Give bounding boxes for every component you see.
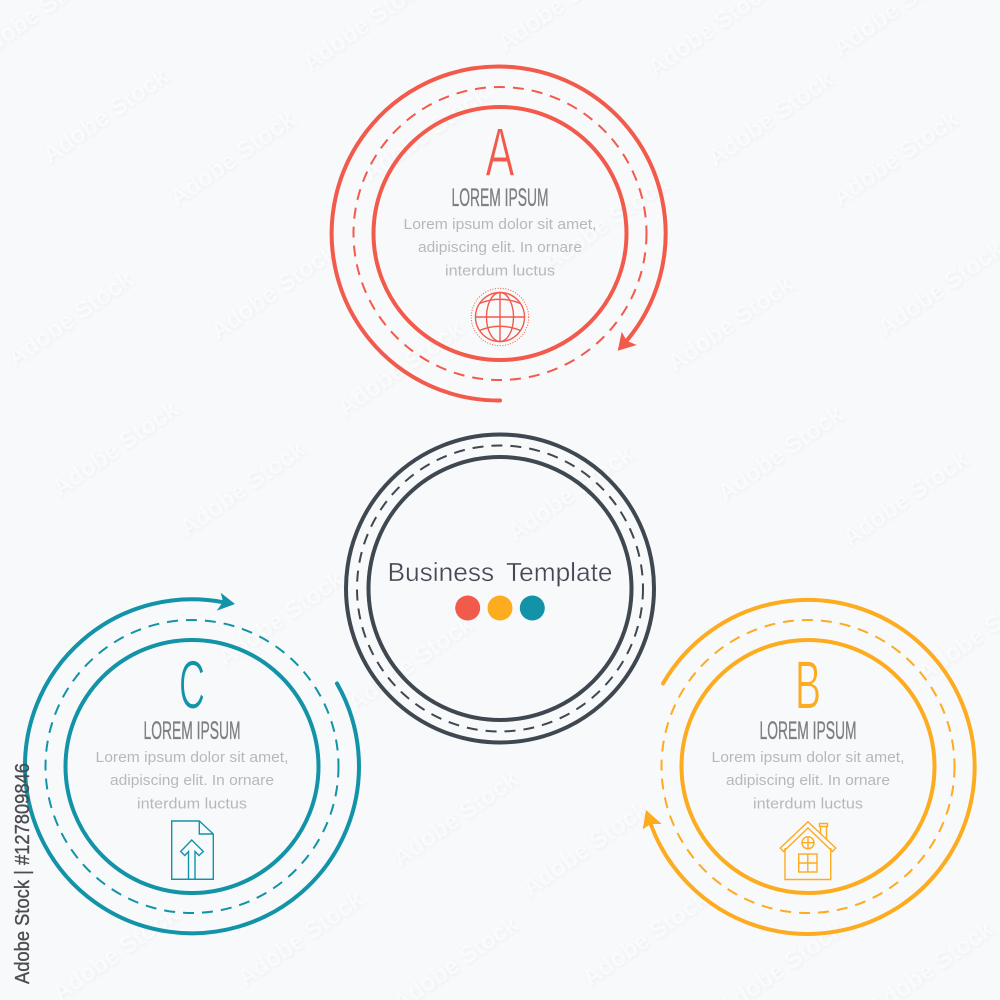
icon: globe (471, 288, 529, 346)
watermark pattern: Adobe Stock (713, 400, 849, 507)
panel: B (orange) (643, 600, 975, 934)
inner ring C (66, 640, 318, 893)
stock id side text: Adobe Stock | #127809846 (12, 763, 34, 984)
watermark pattern: Adobe Stock (48, 395, 184, 502)
text block B: Lorem ipsum dolor sit amet, (711, 749, 905, 766)
text block C (95, 749, 288, 812)
watermark pattern: Adobe Stock (175, 435, 311, 542)
text block C: adipiscing elit. In ornare (110, 772, 274, 789)
inner ring B (682, 640, 934, 893)
panel: center Business Template (346, 434, 654, 742)
title: Business Template (388, 557, 612, 587)
text block B: adipiscing elit. In ornare (726, 772, 890, 789)
watermark pattern: Adobe Stock (828, 105, 964, 212)
dashed ring A (354, 87, 646, 380)
dashed ring B (662, 620, 954, 913)
panel: A (red) (332, 67, 666, 401)
letter A: A (486, 114, 514, 191)
watermark pattern: Adobe Stock (343, 610, 479, 717)
text block A: interdum luctus (445, 262, 555, 280)
watermark pattern: Adobe Stock (578, 885, 714, 992)
text block C: Lorem ipsum dolor sit amet, (95, 749, 289, 766)
watermark pattern: Adobe Stock (333, 315, 469, 422)
text block B (712, 749, 904, 812)
letter B: B (795, 646, 821, 724)
outer ring center (346, 434, 654, 742)
text block A: adipiscing elit. In ornare (418, 239, 582, 256)
heading A: LOREM IPSUM (452, 184, 548, 212)
watermark pattern: Adobe Stock (538, 170, 674, 277)
dashed ring C (46, 620, 338, 913)
inner ring A (374, 107, 626, 360)
text block A (404, 216, 596, 280)
watermark pattern: Adobe Stock (703, 65, 839, 172)
watermark pattern: Adobe Stock (38, 62, 174, 169)
watermark pattern: Adobe Stock (3, 265, 139, 372)
watermark pattern: Adobe Stock (838, 445, 974, 552)
watermark pattern: Adobe Stock (388, 765, 524, 872)
outer arrow ring A (332, 67, 666, 401)
outer arrow ring C (25, 593, 359, 933)
inner ring center (368, 457, 632, 720)
outer arrow ring B (643, 600, 975, 934)
letter C: C (179, 646, 205, 724)
heading C: LOREM IPSUM (144, 717, 240, 745)
watermark pattern: Adobe Stock (503, 440, 639, 547)
watermark pattern: Adobe Stock (518, 795, 654, 902)
icon: file upload (172, 821, 213, 879)
watermark pattern: Adobe Stock (206, 238, 342, 345)
text block B: interdum luctus (753, 796, 863, 812)
colour dots (455, 596, 545, 620)
icon: house (780, 822, 836, 880)
watermark pattern: Adobe Stock (213, 565, 349, 672)
dashed ring center (357, 446, 643, 732)
text block A: Lorem ipsum dolor sit amet, (403, 216, 597, 233)
watermark pattern: Adobe Stock (165, 105, 301, 212)
watermark pattern: Adobe Stock (358, 80, 494, 187)
panel: C (teal) (25, 593, 359, 933)
watermark pattern: Adobe Stock (233, 885, 369, 992)
text block C: interdum luctus (137, 796, 247, 812)
watermark pattern: Adobe Stock (663, 270, 799, 377)
heading B: LOREM IPSUM (760, 717, 856, 745)
